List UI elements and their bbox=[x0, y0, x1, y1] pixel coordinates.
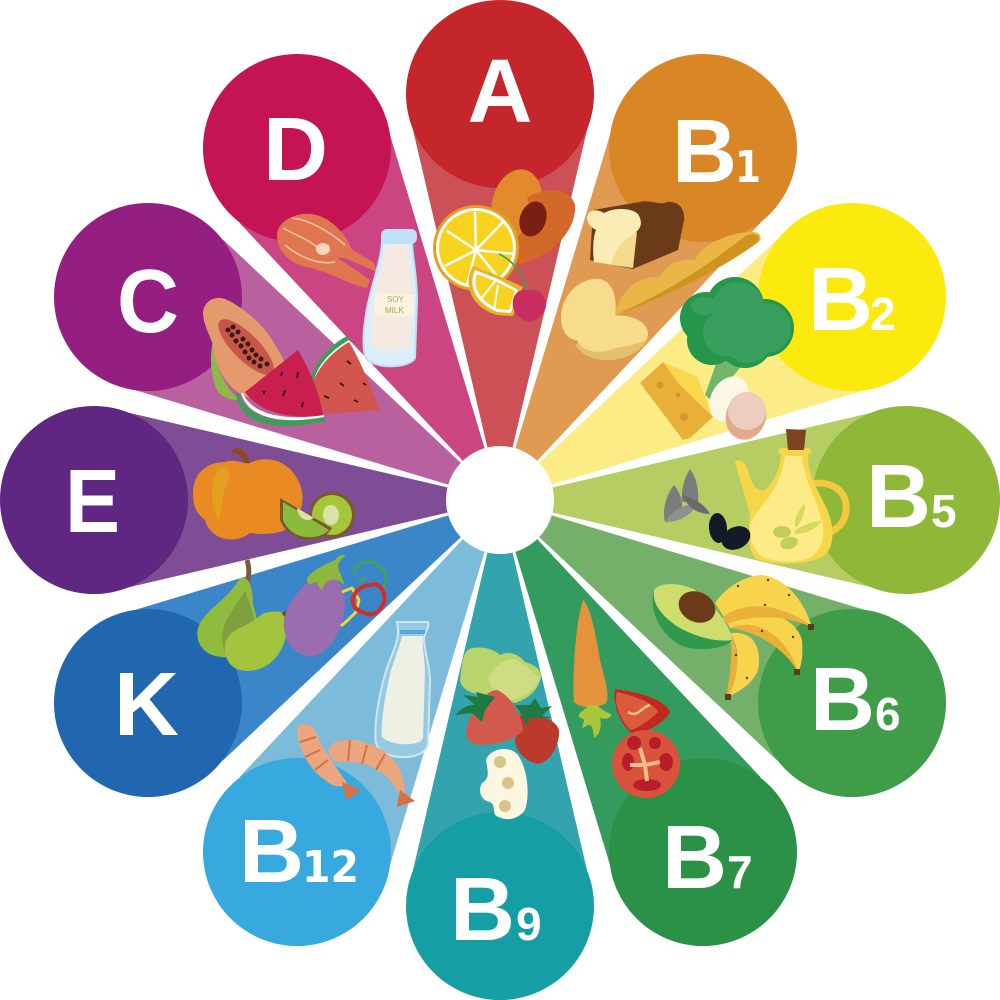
panel: vitamin B5 spoke: B bbox=[866, 447, 931, 547]
panel: vitamin B7 spoke: B bbox=[662, 808, 727, 908]
panel: vitamin B1 spoke: 1 bbox=[735, 142, 761, 193]
panel: vitamin A spoke bbox=[406, 0, 594, 450]
panel: vitamin E spoke: E bbox=[65, 452, 120, 552]
bottle label: SOY bbox=[387, 295, 405, 304]
food: olive oil jug, sunflower seeds and olives bbox=[664, 429, 846, 564]
food: pumpkin and kiwi bbox=[193, 448, 355, 540]
panel: vitamin B7 spoke: 7 bbox=[727, 846, 753, 898]
panel: vitamin B2 spoke: B bbox=[808, 250, 873, 350]
food: broccoli, cheese and eggs bbox=[640, 277, 794, 444]
panel: vitamin B12 spoke bbox=[203, 500, 550, 946]
bottle label: MILK bbox=[385, 306, 404, 315]
panel: vitamin D spoke bbox=[203, 54, 550, 500]
panel: vitamin K spoke: K bbox=[114, 655, 179, 755]
food: lettuce, strawberries and mushroom bbox=[455, 647, 559, 819]
panel: vitamin E spoke bbox=[0, 406, 450, 594]
food: avocado and bananas bbox=[653, 575, 814, 700]
panel: vitamin B12 spoke: 12 bbox=[302, 842, 359, 893]
food: papaya and watermelon bbox=[203, 298, 380, 426]
panel: vitamin A spoke: A bbox=[468, 42, 532, 142]
panel: vitamin B2 spoke bbox=[500, 203, 946, 550]
panel: vitamin B7 spoke bbox=[450, 500, 797, 946]
food: apricot, lemon and cherry bbox=[433, 165, 575, 322]
panel: vitamin K spoke bbox=[54, 450, 500, 797]
panel: vitamin B12 spoke: B bbox=[239, 802, 304, 902]
food: pears, eggplant and bell peppers bbox=[197, 555, 386, 671]
panel: vitamin B6 spoke: 6 bbox=[875, 688, 901, 740]
food: salmon steak and soy milk bottle bbox=[277, 214, 417, 366]
centre hub bbox=[446, 446, 554, 554]
panel: vitamin B9 spoke bbox=[406, 550, 594, 1000]
food: bread, baguette and potatoes bbox=[561, 201, 761, 360]
panel: vitamin C spoke bbox=[54, 203, 500, 550]
panel: vitamin B9 spoke: B bbox=[450, 860, 515, 960]
panel: vitamin B9 spoke: 9 bbox=[516, 898, 542, 950]
panel: vitamin B1 spoke bbox=[450, 54, 797, 500]
panel: vitamin D spoke: D bbox=[263, 100, 328, 200]
bottle label bbox=[374, 292, 415, 317]
panel: vitamin B5 spoke bbox=[550, 406, 1000, 594]
food: milk bottle and shrimp bbox=[297, 622, 430, 807]
panel: vitamin B2 spoke: 2 bbox=[870, 288, 896, 340]
panel: vitamin B5 spoke: 5 bbox=[931, 485, 957, 537]
panel: vitamin B6 spoke bbox=[500, 450, 946, 797]
panel: vitamin B6 spoke: B bbox=[810, 650, 875, 750]
panel: vitamin B1 spoke: B bbox=[672, 102, 737, 202]
panel: vitamin C spoke: C bbox=[117, 252, 179, 352]
food: carrot and tomatoes bbox=[573, 600, 680, 798]
